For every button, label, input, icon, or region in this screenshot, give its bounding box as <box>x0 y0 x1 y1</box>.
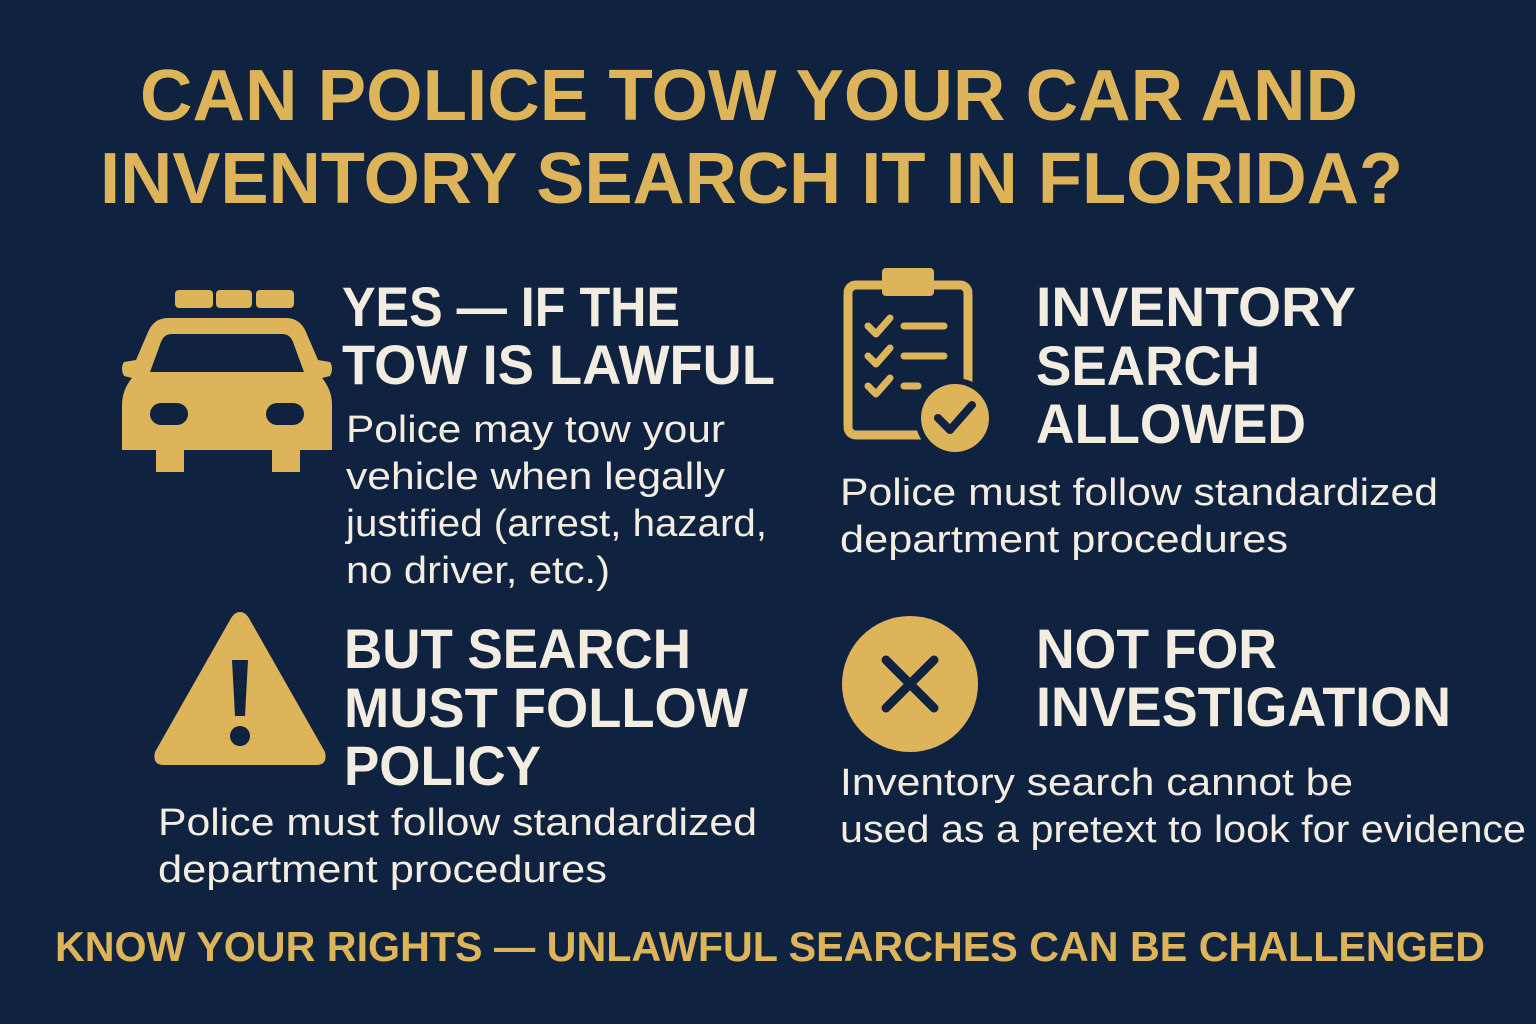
icon: police car <box>122 290 332 472</box>
heading: but search must follow policy: POLICY <box>344 734 541 797</box>
heading: inventory search allowed: ALLOWED <box>1036 392 1306 455</box>
icon: x circle <box>842 616 978 752</box>
text: tow body: justified (arrest, hazard, <box>345 503 767 545</box>
text: investigation body: Inventory search cannot be <box>840 762 1353 804</box>
heading: but search must follow policy: BUT SEARCH <box>344 617 691 680</box>
text: policy body <box>158 802 757 891</box>
text: policy body: department procedures <box>158 849 607 891</box>
text: policy body: Police must follow standardized <box>158 802 757 844</box>
heading: inventory search allowed: SEARCH <box>1036 334 1260 397</box>
title: INVENTORY SEARCH IT IN FLORIDA? <box>100 139 1403 219</box>
icon: clipboard with check <box>848 268 995 458</box>
text: inventory body: department procedures <box>840 519 1288 561</box>
text: tow body: Police may tow your <box>346 409 725 451</box>
text: investigation body <box>840 762 1526 851</box>
heading: but search must follow policy <box>344 617 748 797</box>
text: tow body <box>345 409 767 592</box>
heading: not for investigation: INVESTIGATION <box>1036 675 1451 738</box>
heading: yes if the tow is lawful: YES — IF THE <box>342 275 680 338</box>
heading: not for investigation <box>1036 617 1451 738</box>
title: CAN POLICE TOW YOUR CAR AND <box>140 56 1358 136</box>
heading: inventory search allowed <box>1036 275 1356 455</box>
icon: warning triangle <box>154 612 326 765</box>
heading: yes if the tow is lawful: TOW IS LAWFUL <box>342 333 775 396</box>
heading: not for investigation: NOT FOR <box>1036 617 1277 680</box>
text: tow body: no driver, etc.) <box>346 550 610 592</box>
heading: yes if the tow is lawful <box>342 275 775 396</box>
text: inventory body: Police must follow standardized <box>840 472 1438 514</box>
text: tow body: vehicle when legally <box>346 456 725 498</box>
title <box>100 56 1403 219</box>
text: investigation body: used as a pretext to look for evidence <box>840 809 1526 851</box>
text: inventory body <box>840 472 1438 561</box>
heading: inventory search allowed: INVENTORY <box>1036 275 1356 338</box>
footer: KNOW YOUR RIGHTS — UNLAWFUL SEARCHES CAN BE CHALLENGED <box>55 923 1485 970</box>
heading: but search must follow policy: MUST FOLLOW <box>344 676 748 739</box>
